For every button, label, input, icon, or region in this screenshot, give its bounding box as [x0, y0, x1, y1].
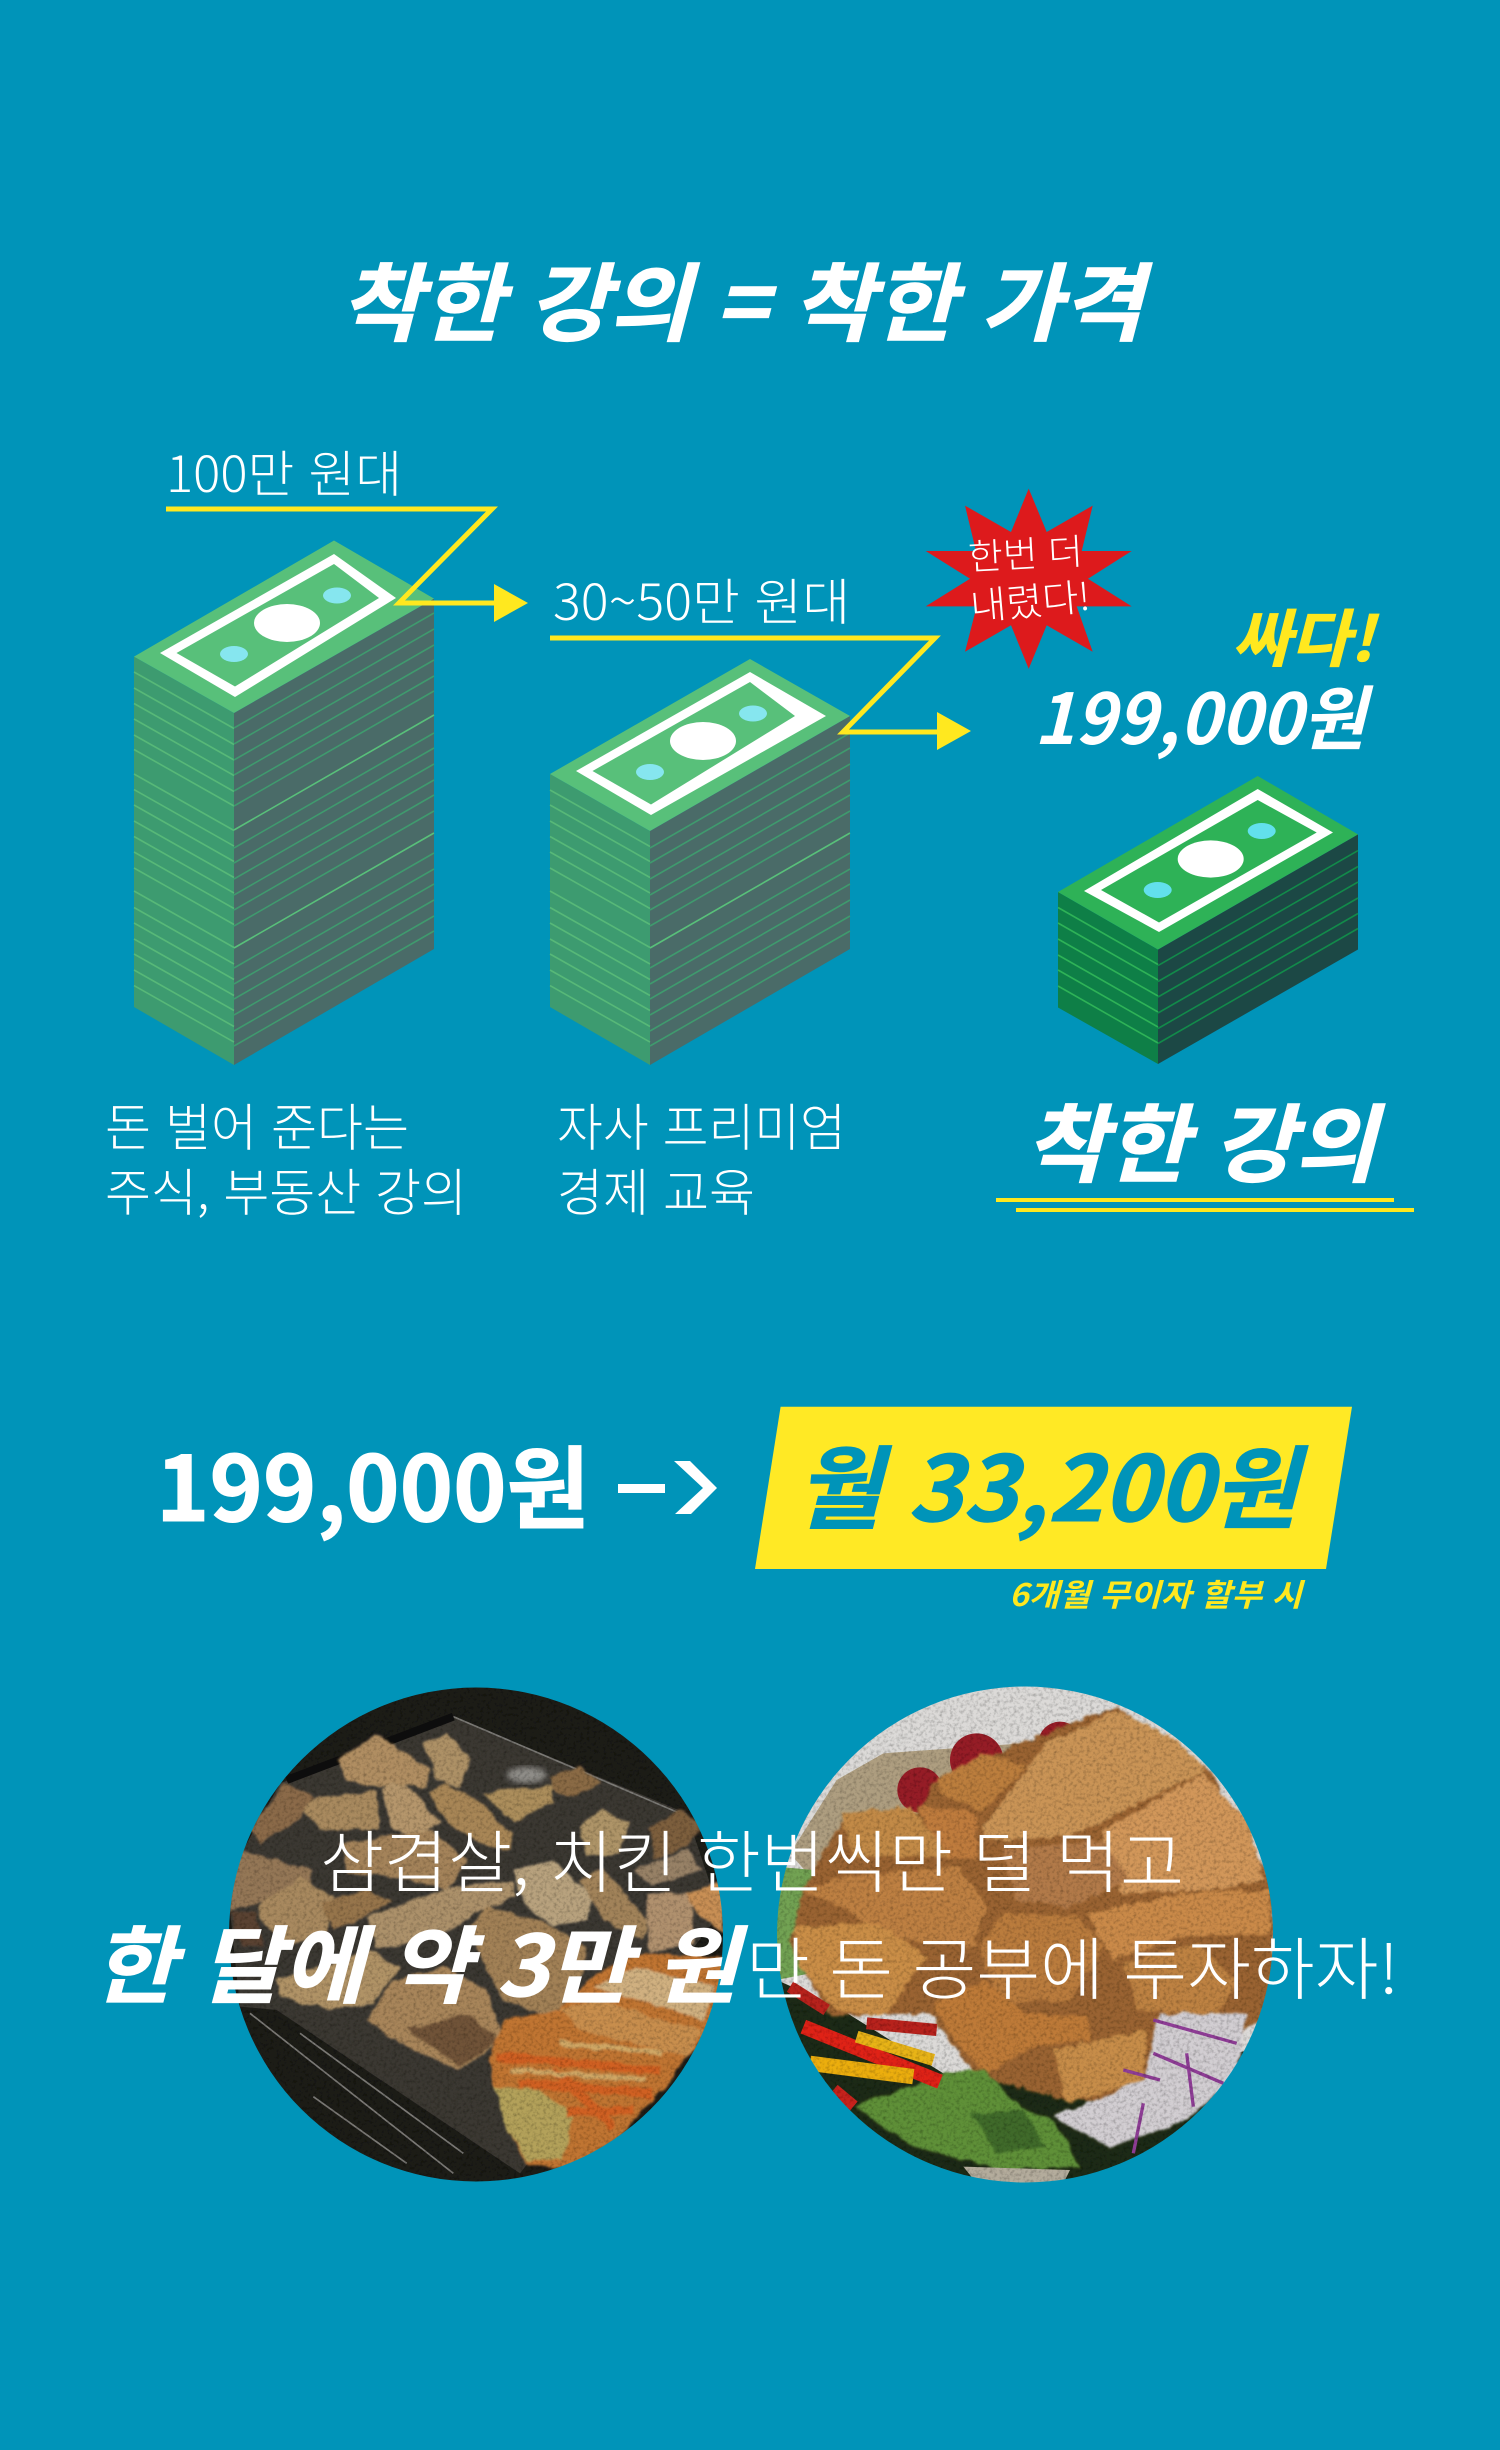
title: 착한 강의 = 착한 가격: [340, 236, 1153, 359]
caption: stock and real estate lectures: 돈 벌어 준다는: [105, 1087, 409, 1161]
caption: stock and real estate lectures: 주식, 부동산 강의: [105, 1152, 467, 1226]
caption: premium economics education: 경제 교육: [557, 1152, 755, 1226]
arrow: 100만 원대 to 30~50만 원대: [166, 509, 528, 622]
badge: starburst: [926, 489, 1132, 669]
overlay text line 2: [93, 1900, 1399, 2021]
callout: 싸다!: 싸다!: [1232, 589, 1379, 679]
caption: premium economics education: 자사 프리미엄: [557, 1087, 846, 1161]
highlight banner: [755, 1407, 1352, 1569]
panel: monthly installment: [156, 1407, 1352, 1615]
panel: price comparison: [105, 435, 1414, 1226]
overlay text line 2: 만 돈 공부에 투자하자!: [746, 1915, 1399, 2014]
photo: fried chicken: [770, 1680, 1290, 2200]
money stack: tall: [134, 540, 434, 1065]
photo: pork belly and kimchi: [220, 1680, 740, 2200]
footnote: 6개월 무이자 할부 시: [1009, 1570, 1306, 1615]
caption: premium economics education: [557, 1087, 846, 1226]
money stack: medium: [550, 659, 850, 1065]
arrow: to monthly price: [618, 1461, 717, 1514]
arrow: 30~50만 원대 to 착한 강의: [550, 638, 971, 750]
price label: 30~50만 원대: 30~50만 원대: [553, 563, 850, 635]
price label: 100만 원대: 100만 원대: [166, 435, 402, 507]
overlay text line 1: 삼겹살, 치킨 한번씩만 덜 먹고: [320, 1808, 1184, 1907]
heading: 착한 강의 with double underline: 착한 강의: [1025, 1077, 1385, 1200]
monthly price: 월 33,200원: [796, 1417, 1309, 1547]
badge: starburst: 한번 더: [967, 523, 1084, 581]
caption: stock and real estate lectures: [105, 1087, 467, 1226]
money stack: short: [1058, 776, 1358, 1064]
badge: starburst: 내렸다!: [968, 566, 1092, 631]
price before: 199,000원: [156, 1417, 590, 1547]
panel: food photos: [93, 1680, 1399, 2200]
price: 199,000원: 199,000원: [1034, 664, 1375, 765]
overlay text line 2: 한 달에 약 3만 원: [93, 1900, 748, 2021]
